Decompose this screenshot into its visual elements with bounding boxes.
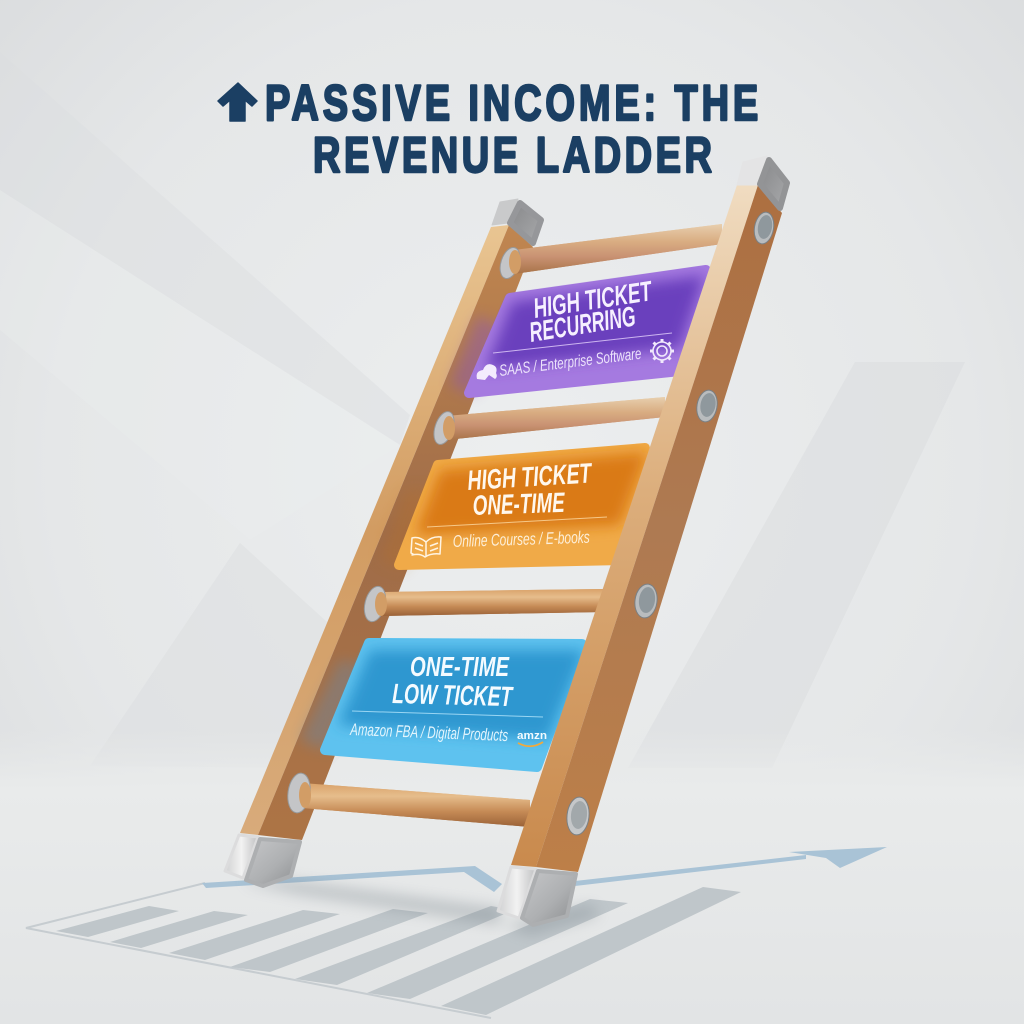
bars — [56, 887, 741, 1015]
left washers — [285, 245, 524, 814]
subtitle: Amazon FBA / Digital Products — [349, 720, 509, 745]
divider — [352, 711, 543, 717]
right bolts — [565, 211, 776, 836]
panel heading: LOW TICKET — [392, 678, 515, 712]
bolt 4 — [565, 796, 591, 836]
icon: open book — [411, 537, 441, 557]
panel heading: HIGH TICKET — [531, 275, 655, 324]
panel heading: ONE-TIME — [410, 651, 510, 682]
title line 2: REVENUE LADDER — [313, 128, 712, 183]
panel: high ticket recurring — [450, 270, 706, 395]
icon: amazon logo: amzn — [517, 730, 547, 742]
icon: cloud — [477, 364, 497, 380]
rung 1 — [514, 224, 722, 274]
left top cap — [492, 199, 541, 243]
panel heading: ONE-TIME — [472, 487, 566, 521]
bolt 3 — [633, 583, 659, 619]
panel heading — [392, 651, 515, 712]
right top cap — [737, 156, 787, 208]
bolt 1 — [752, 211, 776, 245]
right rail — [511, 185, 782, 872]
icon: up arrow — [218, 83, 257, 121]
ladder: front parts — [498, 156, 787, 925]
rung 3 — [378, 589, 603, 616]
subtitle: Online Courses / E-books — [453, 528, 590, 551]
panel heading — [527, 275, 655, 348]
rung 2 — [446, 397, 665, 440]
trend arrow — [202, 847, 887, 892]
subtitle: SAAS / Enterprise Software — [498, 346, 642, 380]
panel heading: HIGH TICKET — [466, 457, 594, 496]
rung fronts over left rail — [302, 224, 722, 827]
rung 4 — [302, 783, 530, 827]
divider — [427, 517, 607, 527]
ladder: back parts — [225, 199, 722, 935]
panel: high ticket one-time — [380, 448, 648, 570]
icon: gear — [650, 339, 674, 363]
left foot — [225, 835, 300, 886]
right foot — [498, 867, 576, 925]
floor chart — [26, 847, 887, 1018]
panel: one-time low ticket — [300, 643, 585, 767]
title — [218, 76, 758, 183]
title line 1: PASSIVE INCOME: THE — [265, 76, 758, 131]
bolt 2 — [694, 389, 720, 423]
left rail — [240, 225, 533, 840]
icon: amazon logo — [517, 730, 547, 746]
divider — [493, 333, 672, 353]
panel heading: RECURRING — [527, 301, 638, 348]
panel heading — [466, 457, 594, 521]
rung ends over washers — [299, 250, 521, 808]
chart axes — [26, 883, 491, 1018]
ground shadows — [240, 880, 600, 935]
